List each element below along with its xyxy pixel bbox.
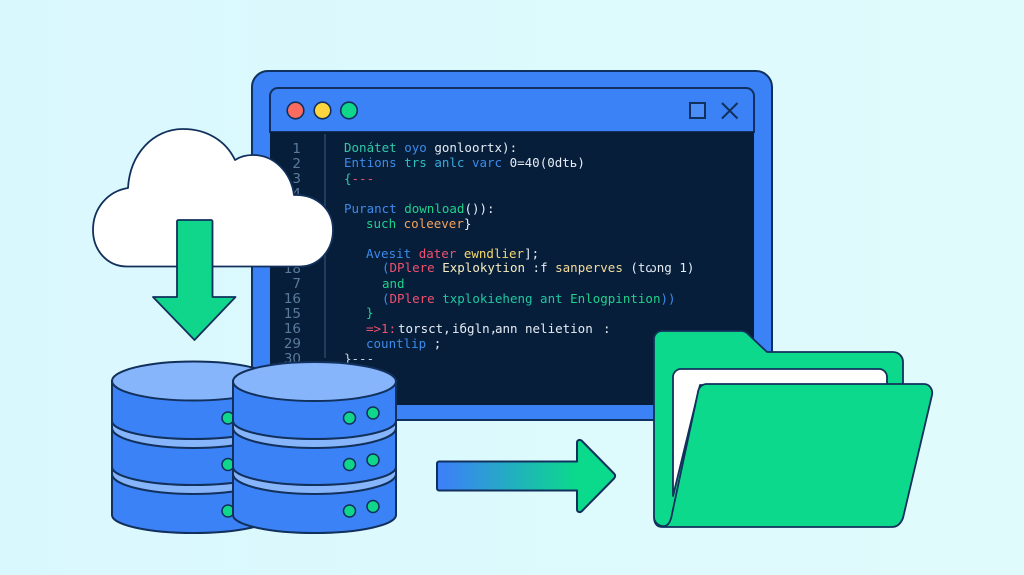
code text: Puranct download()): <box>344 201 495 216</box>
line numbers: 7 <box>292 276 301 292</box>
disc 3 <box>233 474 396 533</box>
gutter separator <box>324 134 326 358</box>
line numbers: 4 <box>292 186 301 202</box>
folder back <box>654 331 903 527</box>
band 1 <box>233 421 396 448</box>
code editor window <box>252 71 772 420</box>
code text: } <box>366 305 374 320</box>
code text: (DPlere Explokytion :f sanperves (tꞷng 1) <box>382 260 694 275</box>
cloud <box>93 129 333 266</box>
disc 1 <box>233 381 396 439</box>
paper <box>673 369 887 496</box>
line numbers: 30 <box>284 351 301 367</box>
database right <box>233 362 396 533</box>
cloud download icon <box>93 129 333 340</box>
code text: Avesit dater ewndlier]; <box>366 246 539 261</box>
code text: ann <box>495 321 518 336</box>
code text: {--- <box>344 171 374 186</box>
folder icon <box>654 331 932 527</box>
maximize and close icons <box>690 103 738 118</box>
title bar <box>270 88 754 132</box>
code text <box>344 140 694 366</box>
transfer arrow <box>437 440 615 512</box>
disc 3 <box>112 474 275 533</box>
band 2 <box>112 467 275 494</box>
status lights <box>222 412 234 517</box>
line numbers: 29 <box>284 336 301 352</box>
line numbers: 18 <box>284 261 301 277</box>
code text: Donátet oyo gonloortx): <box>344 140 517 155</box>
top <box>112 362 275 400</box>
code text: countlip ; <box>366 336 441 351</box>
status lights <box>344 407 379 517</box>
disc 1 <box>112 381 275 439</box>
line numbers: 16 <box>284 291 301 307</box>
code text: and <box>382 276 405 291</box>
download arrow <box>153 220 236 340</box>
code text: torsct, <box>398 321 451 336</box>
code text: =>1: <box>366 321 396 336</box>
code text: nelietion <box>525 321 593 336</box>
line numbers: 16 <box>284 321 301 337</box>
code text: (DPlere txplokieheng ant Enlogpintion)) <box>382 291 676 306</box>
band 1 <box>112 421 275 448</box>
window control dots <box>287 102 357 119</box>
top <box>233 362 396 401</box>
code panel <box>270 132 754 405</box>
window frame <box>252 71 772 420</box>
database left <box>112 362 275 533</box>
code text: }--- <box>344 351 374 366</box>
disc 2 <box>112 428 275 485</box>
code text: iбgln, <box>452 321 497 336</box>
line numbers: 2 <box>292 156 301 172</box>
line numbers: 1 <box>292 141 301 157</box>
line numbers: 3 <box>292 171 301 187</box>
code text: Entions trs anlc varc 0=40(0dtь) <box>344 155 585 170</box>
folder back outline <box>654 331 903 517</box>
line numbers: 15 <box>284 306 301 322</box>
folder front <box>654 384 932 527</box>
band 2 <box>233 467 396 494</box>
code text: such coleever} <box>366 216 471 231</box>
line numbers <box>284 141 301 367</box>
disc 2 <box>233 428 396 485</box>
code text: : <box>603 321 611 336</box>
